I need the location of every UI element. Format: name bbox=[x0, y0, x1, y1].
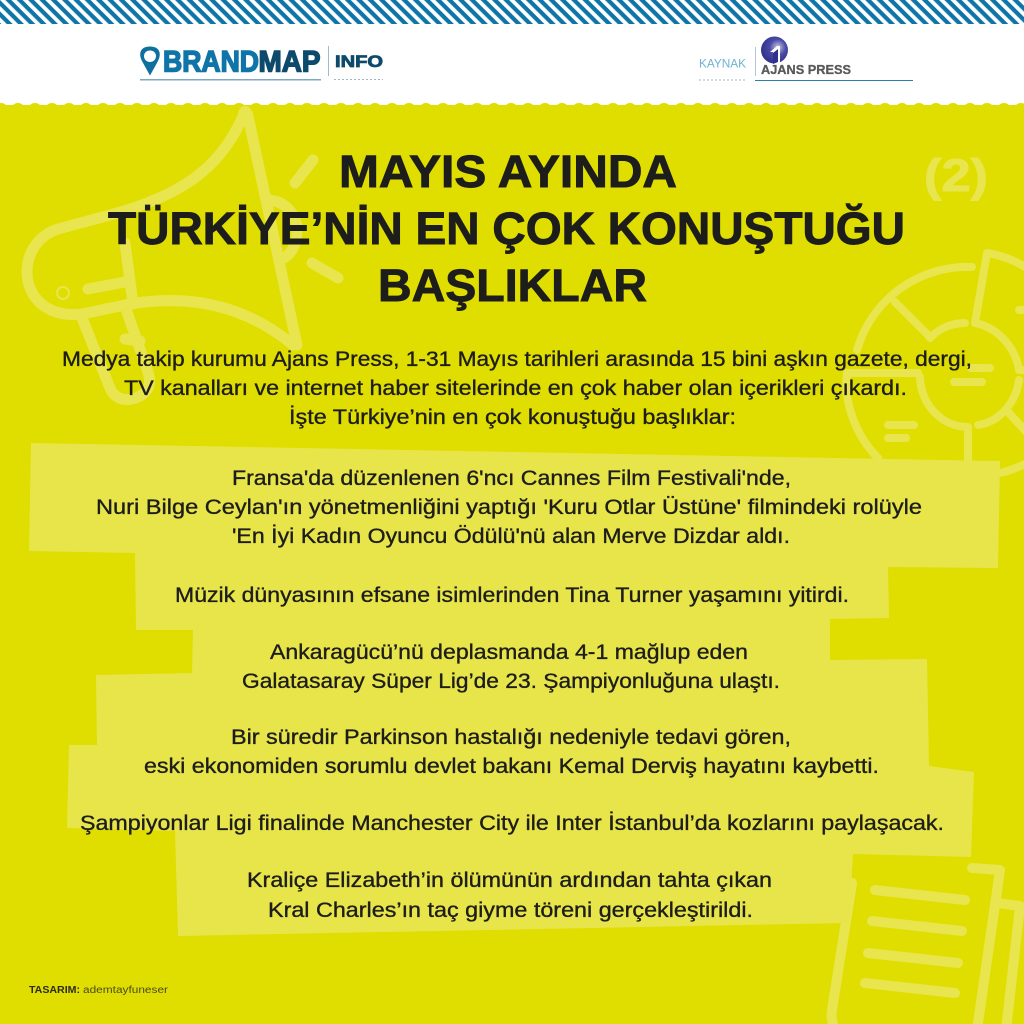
icon: pie chart watermark bbox=[846, 253, 1024, 473]
item: Kemal Derviş: eski ekonomiden sorumlu devlet bakanı Kemal Derviş hayatını kaybetti. bbox=[144, 755, 879, 778]
logo underline bbox=[140, 79, 321, 80]
intro text: TV kanalları ve internet haber sitelerinde en çok haber olan içerikleri çıkardı. bbox=[124, 377, 907, 400]
design credit: ademtayfuneser bbox=[83, 985, 169, 996]
label: KAYNAK: KAYNAK bbox=[699, 56, 746, 70]
title: MAYIS AYINDA bbox=[339, 146, 677, 197]
item: Galatasaray: Galatasaray Süper Lig’de 23. Şampiyonluğuna ulaştı. bbox=[242, 670, 780, 693]
logo: BrandMap Info bbox=[140, 46, 383, 80]
wordmark: MAP: MAP bbox=[258, 46, 320, 78]
divider bbox=[755, 47, 756, 76]
intro text: İşte Türkiye’nin en çok konuştuğu başlıklar: bbox=[289, 406, 736, 429]
icon: megaphone watermark bbox=[27, 112, 338, 400]
item: Galatasaray bbox=[242, 641, 780, 693]
item: Cannes: 'En İyi Kadın Oyuncu Ödülü'nü alan Merve Dizdar aldı. bbox=[232, 525, 790, 548]
title bbox=[108, 146, 905, 311]
wordmark: AJANS PRESS: AJANS PRESS bbox=[761, 62, 851, 77]
light stepped text panel bbox=[29, 443, 1000, 936]
item: Galatasaray: Ankaragücü’nü deplasmanda 4-1 mağlup eden bbox=[270, 641, 748, 664]
item: Cannes: Fransa'da düzenlenen 6'ncı Cannes Film Festivali'nde, bbox=[232, 467, 791, 490]
icon: map pin bbox=[140, 46, 160, 76]
header: blue diagonal stripes bbox=[0, 0, 1024, 24]
title: TÜRKİYE’NİN EN ÇOK KONUŞTUĞU bbox=[108, 202, 905, 254]
item: Cannes: Nuri Bilge Ceylan'ın yönetmenliğini yaptığı 'Kuru Otlar Üstüne' filmindeki rolüyle bbox=[96, 496, 922, 519]
item: Champions League: Şampiyonlar Ligi finalinde Manchester City ile Inter İstanbul’da kozlarını paylaşacak. bbox=[80, 812, 944, 835]
header: white band bbox=[0, 0, 1024, 105]
item: Kemal Derviş: Bir süredir Parkinson hastalığı nedeniyle tedavi gören, bbox=[231, 726, 791, 749]
icon: documents watermark bbox=[832, 868, 1020, 1024]
header: scalloped edge bbox=[0, 103, 1024, 120]
item: Cannes bbox=[96, 467, 922, 548]
item: Kemal Derviş bbox=[144, 726, 879, 778]
wordmark: INFO: INFO bbox=[335, 52, 383, 71]
item: King Charles: Kraliçe Elizabeth’in ölümünün ardından tahta çıkan bbox=[247, 869, 772, 892]
dotted rule under KAYNAK bbox=[699, 79, 746, 81]
intro text: Medya takip kurumu Ajans Press, 1-31 Mayıs tarihleri arasında 15 bini aşkın gazete, dergi, bbox=[62, 348, 972, 371]
icon: Ajans Press globe bbox=[761, 36, 788, 64]
icon: page number (2): (2) bbox=[924, 150, 988, 201]
wordmark: BRAND: BRAND bbox=[163, 46, 259, 78]
item: King Charles bbox=[247, 869, 772, 922]
source underline bbox=[755, 80, 913, 81]
item: King Charles: Kral Charles’ın taç giyme töreni gerçekleştirildi. bbox=[268, 899, 753, 922]
intro text bbox=[62, 348, 972, 429]
design credit bbox=[29, 985, 169, 996]
logo divider bbox=[328, 46, 329, 76]
dotted rule under INFO bbox=[334, 78, 383, 80]
design credit: TASARIM: bbox=[29, 985, 80, 996]
item: Tina Turner: Müzik dünyasının efsane isimlerinden Tina Turner yaşamını yitirdi. bbox=[175, 584, 849, 607]
title: BAŞLIKLAR bbox=[378, 260, 647, 311]
source: Ajans Press bbox=[699, 36, 913, 81]
